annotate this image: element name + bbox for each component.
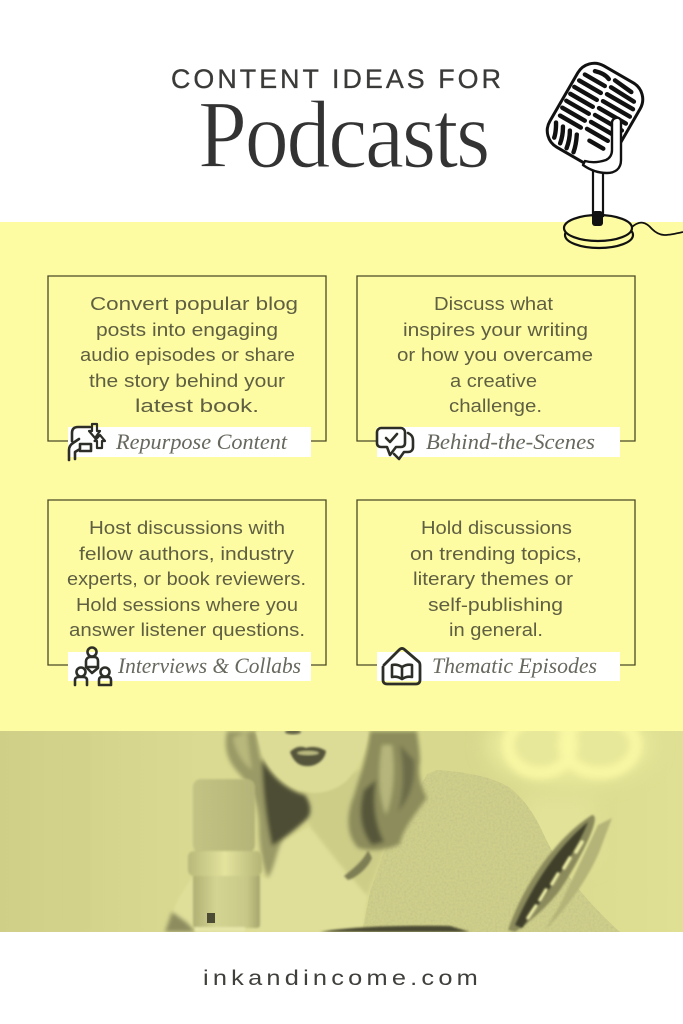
sweater [362, 770, 620, 932]
yellow panel [0, 222, 683, 731]
body text: Hold sessions where you [76, 594, 298, 615]
neck [305, 772, 382, 891]
title [171, 64, 504, 188]
face [256, 731, 368, 793]
body text: self-publishing [428, 594, 563, 615]
body text: audio episodes or share [80, 344, 295, 365]
ring light glow [487, 731, 628, 784]
lips [290, 747, 326, 766]
icon: house with open book [383, 648, 420, 684]
icon: group of people [75, 648, 111, 685]
body text: Hold discussions [421, 517, 572, 538]
body text: literary themes or [413, 568, 573, 589]
label: interviews and collabs: Interviews & Collabs [117, 653, 301, 678]
panel: repurpose content [48, 276, 326, 460]
top garment [168, 826, 367, 932]
body text: fellow authors, industry [79, 543, 295, 564]
body text: in general. [449, 619, 543, 640]
label: behind-the-scenes: Behind-the-Scenes [426, 429, 595, 454]
label bar [377, 427, 620, 457]
body text: challenge. [449, 395, 542, 416]
label: repurpose content: Repurpose Content [115, 429, 288, 454]
body text: answer listener questions. [69, 619, 305, 640]
panel: interviews and collabs [48, 500, 326, 685]
body text: on trending topics, [410, 543, 582, 564]
body text [397, 293, 593, 416]
panel: thematic episodes [357, 500, 635, 684]
body text: Convert popular blog [90, 293, 298, 314]
body text [67, 517, 306, 640]
body text [410, 517, 582, 640]
body text: Host discussions with [89, 517, 285, 538]
panel frame [48, 276, 326, 441]
icon: hand with arrows [69, 424, 105, 460]
book [508, 815, 595, 932]
footer url: inkandincome.com [203, 967, 482, 990]
title word: podcasts: Podcasts [198, 81, 488, 188]
panel frame [357, 500, 635, 665]
panel frame [357, 276, 635, 441]
label: thematic episodes: Thematic Episodes [432, 653, 597, 678]
hand [165, 912, 196, 932]
body text: the story behind your [89, 370, 285, 391]
panel frame [48, 500, 326, 665]
hair [226, 731, 427, 878]
body text: experts, or book reviewers. [67, 568, 306, 589]
body text: inspires your writing [403, 319, 588, 340]
label bar [68, 652, 311, 681]
body text: or how you overcame [397, 344, 593, 365]
body text: posts into engaging [96, 319, 278, 340]
studio microphone [188, 779, 262, 932]
label bar [377, 652, 620, 681]
title line: content ideas for: CONTENT IDEAS FOR [171, 64, 504, 94]
panel: behind-the-scenes [357, 276, 635, 459]
label bar [68, 427, 311, 457]
photo: woman reading into a microphone [0, 731, 683, 932]
icon: vintage microphone [540, 56, 683, 248]
body text: a creative [450, 370, 537, 391]
body text: Discuss what [434, 293, 553, 314]
body text: latest book. [135, 395, 259, 416]
body text [80, 293, 298, 416]
icon: chat bubbles with checks [377, 428, 413, 459]
